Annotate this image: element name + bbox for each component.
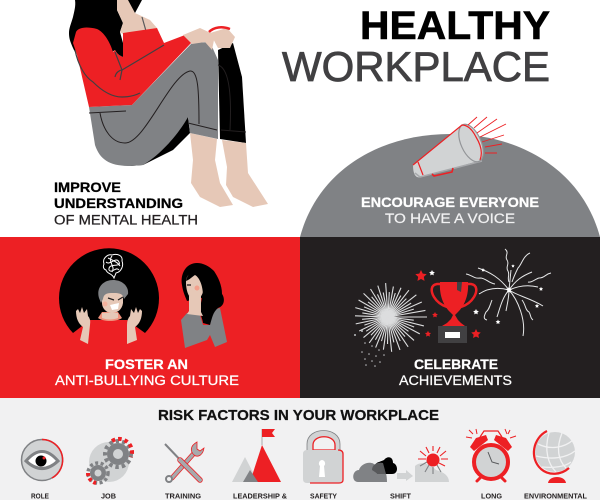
man [73, 280, 145, 360]
labels: risk factor names [31, 492, 587, 500]
woman [181, 263, 227, 348]
icon: environmental globe [534, 431, 575, 483]
icon: trophy [432, 282, 476, 343]
icon: training tools [165, 442, 204, 482]
illustration: seated woman [69, 0, 268, 207]
text: improve understanding: UNDERSTANDING [54, 196, 183, 211]
icon: firework burst right [466, 249, 551, 336]
heading: risk factors: RISK FACTORS IN YOUR WORKPLACE [158, 407, 439, 424]
icon: firework burst left [355, 283, 427, 352]
text: celebrate: CELEBRATE [414, 357, 498, 372]
text: encourage everyone [361, 195, 539, 226]
icon: job gears [88, 439, 132, 483]
icon: shift clouds and sun [353, 446, 449, 482]
red stars [415, 270, 481, 338]
icon: role eye [22, 439, 63, 480]
text: anti-bullying: FOSTER AN [105, 357, 188, 372]
panel: celebrate [300, 237, 600, 398]
title: HEALTHY [360, 4, 550, 48]
panel: anti-bullying [0, 237, 300, 398]
text: anti-bullying [55, 357, 239, 388]
sparkle dots [354, 330, 385, 367]
icon: leadership mountain [232, 429, 281, 482]
panel: risk factors [0, 398, 600, 500]
text: improve understanding: OF MENTAL HEALTH [54, 212, 198, 228]
icon: safety padlock [303, 430, 343, 483]
text: improve understanding [54, 180, 198, 228]
black circle [59, 248, 159, 333]
text: celebrate [399, 357, 512, 388]
text: encourage everyone: ENCOURAGE EVERYONE [361, 195, 539, 210]
icon: megaphone [413, 117, 506, 178]
text: encourage everyone: TO HAVE A VOICE [385, 211, 515, 226]
text: anti-bullying: ANTI-BULLYING CULTURE [55, 373, 239, 388]
text: improve understanding: IMPROVE [54, 180, 121, 195]
text: celebrate: ACHIEVEMENTS [399, 373, 512, 388]
stars [429, 264, 543, 324]
icon: long hours clock [466, 429, 516, 481]
title [282, 4, 550, 90]
icon: scribble thought [103, 254, 123, 278]
title: WORKPLACE [282, 43, 550, 90]
panel: encourage everyone dome [300, 134, 600, 237]
